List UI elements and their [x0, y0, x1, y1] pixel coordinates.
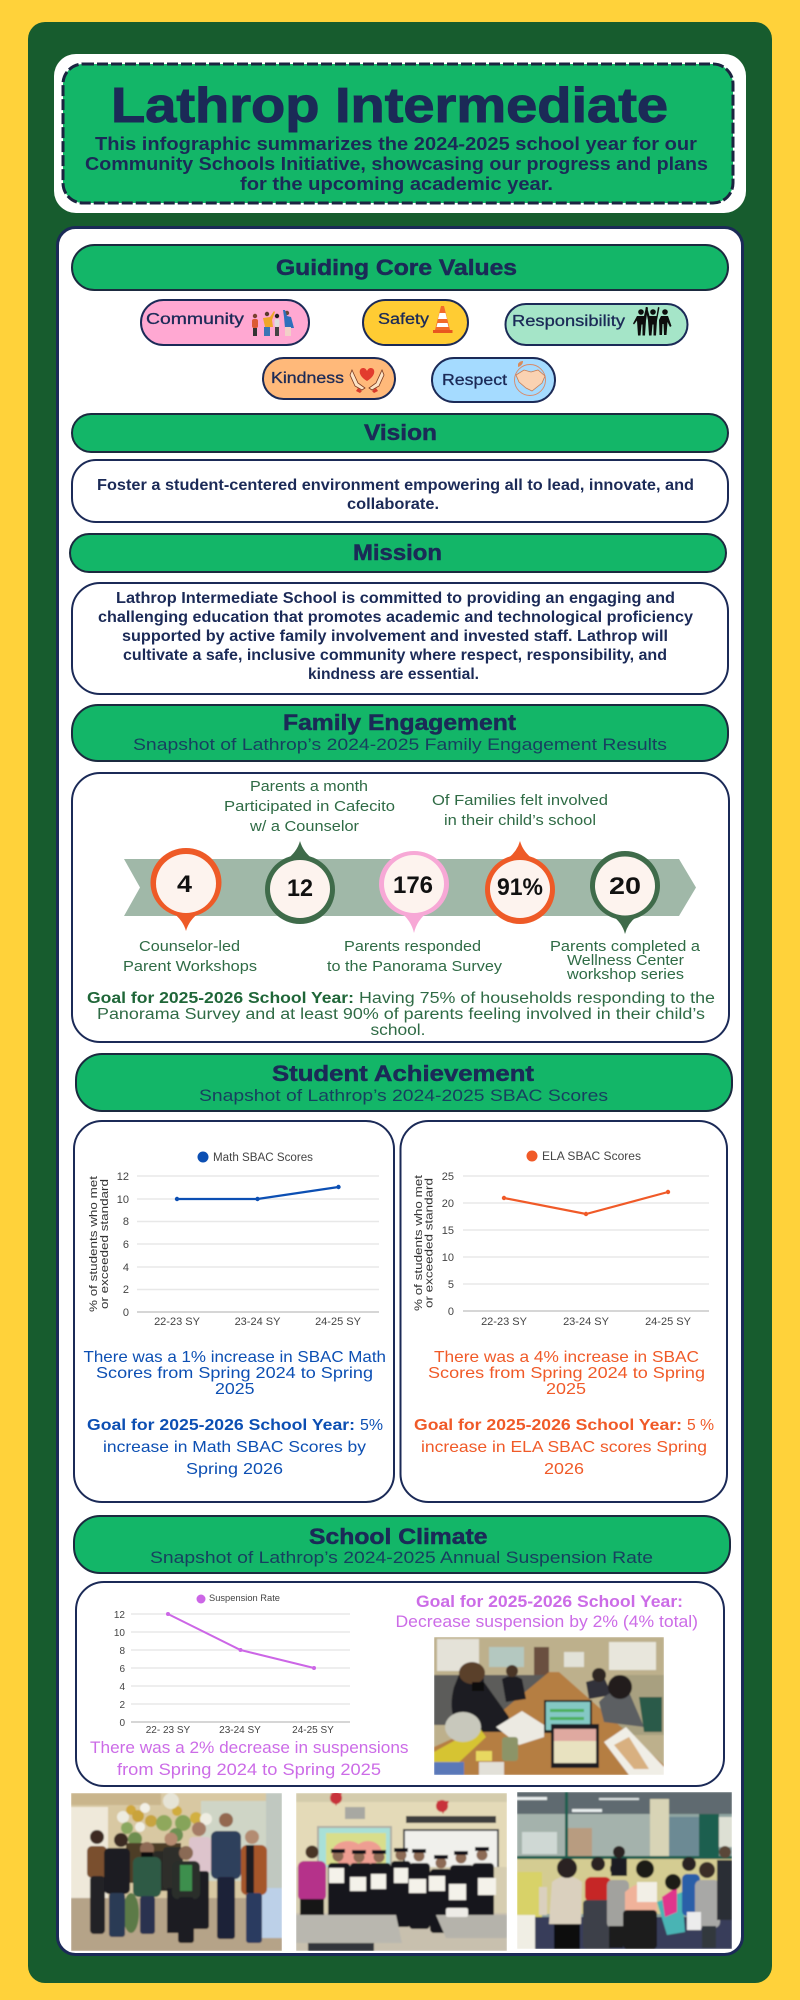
label: families involved: [432, 793, 608, 829]
line chart: math scores: 0: [123, 1307, 129, 1319]
heading: mission: Mission: [353, 540, 442, 565]
line chart: suspension rate: 22- 23 SY: [146, 1725, 191, 1736]
text: ela goal: [414, 1417, 714, 1478]
line chart: suspension rate: 8: [119, 1646, 125, 1657]
line chart: math scores: 12: [117, 1171, 129, 1183]
marker: 176 parents: [379, 851, 449, 933]
line chart: math scores: 24-25 SY: [315, 1316, 362, 1328]
header banner: [54, 54, 746, 213]
chip: kindness: [263, 358, 395, 399]
text block: family goal: Goal for 2025-2026 School Year:: [87, 990, 354, 1007]
heading: school climate: School Climate: [309, 1524, 488, 1549]
photo: parent graduates in caps and gowns: [296, 1792, 507, 1951]
chip: kindness: Kindness: [271, 370, 344, 387]
label: cafecito: w/ a Counselor: [249, 819, 359, 835]
label: panorama survey: Parents responded: [344, 939, 481, 955]
line chart: math scores: 4: [123, 1262, 129, 1274]
chip: safety: Safety: [378, 311, 429, 328]
heading: vision: [72, 414, 728, 452]
line chart: suspension rate: 23-24 SY: [219, 1725, 261, 1736]
line chart: math scores: 10: [117, 1194, 129, 1206]
label: families involved: Of Families felt involved: [432, 793, 608, 809]
line chart: ela scores: 0: [448, 1306, 454, 1318]
label: workshops: [123, 939, 257, 975]
line chart: ela scores: or exceeded standard: [424, 1178, 436, 1308]
chip: responsibility: [506, 304, 688, 345]
heading: guiding core values: Guiding Core Values: [276, 255, 517, 280]
marker: 91 percent: 91%: [497, 874, 543, 901]
line chart: ela scores: 10: [442, 1252, 454, 1264]
line chart: ela scores: % of students who met: [413, 1175, 425, 1311]
text: math goal: increase in Math SBAC Scores by: [103, 1439, 366, 1456]
panel: main white content area: [58, 228, 742, 1954]
intro text: Community Schools Initiative, showcasing our progress and plans: [85, 154, 708, 174]
line chart: suspension rate: 12: [114, 1610, 125, 1621]
line chart: math scores: 8: [123, 1216, 129, 1228]
text: suspension result: from Spring 2024 to Spring 2025: [117, 1761, 381, 1779]
marker: 12 parents: 12: [287, 875, 313, 902]
line chart: ela scores: 23-24 SY: [563, 1316, 610, 1328]
chip: responsibility: Responsibility: [512, 313, 625, 330]
text block: mission statement: challenging education that promotes academic and technological proficiency: [98, 609, 693, 626]
text: suspension goal: Decrease suspension by 2% (4% total): [396, 1613, 698, 1631]
icon: people: [252, 310, 294, 336]
line chart: suspension rate: 10: [114, 1628, 125, 1639]
marker: 176 parents: 176: [393, 872, 433, 899]
text block: vision statement: Foster a student-centered environment empowering all to lead, innovate, and: [97, 477, 694, 494]
text block: mission statement: kindness are essential.: [308, 666, 479, 683]
text: ela result: [428, 1349, 705, 1398]
heading: school climate: Snapshot of Lathrop’s 2024-2025 Annual Suspension Rate: [150, 1549, 653, 1567]
text block: family goal: school.: [370, 1022, 426, 1039]
text: suspension result: There was a 2% decrease in suspensions: [90, 1739, 408, 1757]
line chart: ela scores: [413, 1150, 709, 1328]
icon: traffic cone: [433, 306, 452, 333]
text: math result: There was a 1% increase in SBAC Math: [84, 1349, 386, 1366]
title: Lathrop Intermediate: [111, 79, 668, 133]
text: ela goal: 5 %: [687, 1417, 714, 1434]
text block: family goal: [87, 990, 715, 1039]
text: math goal: Spring 2026: [186, 1461, 283, 1478]
heading: family engagement: [72, 705, 728, 761]
heading: student achievement: [76, 1054, 732, 1111]
label: families involved: in their child’s school: [444, 813, 596, 829]
heading: family engagement: Snapshot of Lathrop’s 2024-2025 Family Engagement Results: [133, 736, 667, 754]
text block: family goal: Panorama Survey and at least 90% of parents feeling involved in their child’s: [97, 1006, 705, 1023]
panel: school climate: [76, 1582, 724, 1786]
text: ela result: There was a 4% increase in SBAC: [434, 1349, 699, 1366]
chip: community: Community: [146, 311, 244, 328]
text: math result: Scores from Spring 2024 to Spring: [96, 1365, 373, 1382]
line chart: suspension rate: 2: [119, 1700, 125, 1711]
intro text: This infographic summarizes the 2024-2025 school year for our: [95, 134, 697, 154]
text: math result: 2025: [215, 1381, 255, 1398]
line chart: math scores: 6: [123, 1239, 129, 1251]
marker: 4 workshops: [150, 848, 222, 931]
arrow band: [124, 859, 696, 916]
text: ela goal: 2026: [544, 1461, 584, 1478]
chip: respect: [432, 358, 555, 402]
text: suspension goal: [396, 1593, 698, 1631]
photo: staff group with balloons: [71, 1793, 282, 1951]
text block: vision statement: [72, 460, 728, 522]
text: ela result: 2025: [546, 1381, 586, 1398]
line chart: suspension rate: 6: [119, 1664, 125, 1675]
label: panorama survey: [327, 939, 503, 975]
label: wellness center: Parents completed a: [550, 939, 701, 955]
line chart: suspension rate: Suspension Rate: [209, 1593, 280, 1604]
chip: safety: [363, 300, 468, 345]
line chart: math scores: or exceeded standard: [99, 1179, 111, 1309]
photo: students gathered in a library: [517, 1792, 732, 1949]
line chart: suspension rate: 24-25 SY: [292, 1725, 334, 1736]
text: math goal: Goal for 2025-2026 School Year:: [87, 1417, 355, 1434]
line chart: suspension rate: 4: [119, 1682, 125, 1693]
label: wellness center: workshop series: [566, 967, 684, 983]
intro text: for the upcoming academic year.: [240, 174, 553, 194]
line chart: ela scores: 25: [442, 1171, 454, 1183]
icon: handshake: [514, 361, 546, 396]
line chart: math scores: 2: [123, 1284, 129, 1296]
text block: family goal: Having 75% of households responding to the: [359, 990, 715, 1007]
marker: 4 workshops: 4: [177, 871, 193, 898]
line chart: ela scores: 5: [448, 1279, 454, 1291]
chip: community: [141, 300, 309, 345]
text: math goal: 5%: [360, 1417, 383, 1434]
heading: vision: Vision: [364, 420, 437, 445]
chip: respect: Respect: [442, 372, 508, 389]
text block: mission statement: [72, 583, 728, 694]
heading: mission: [70, 534, 726, 572]
panel: math sbac: [74, 1121, 394, 1502]
text: ela goal: increase in ELA SBAC scores Spring: [421, 1439, 707, 1456]
panel: ela sbac: [400, 1121, 727, 1502]
heading: school climate: [74, 1516, 730, 1573]
text: ela result: Scores from Spring 2024 to Spring: [428, 1365, 705, 1382]
text: ela goal: Goal for 2025-2026 School Year:: [414, 1417, 682, 1434]
text block: mission statement: supported by active family involvement and invested staff. Lathrop will: [122, 628, 668, 645]
line chart: math scores: 22-23 SY: [154, 1316, 201, 1328]
label: cafecito: Participated in Cafecito: [224, 799, 395, 815]
text: suspension result: [90, 1739, 408, 1779]
line chart: math scores: 23-24 SY: [235, 1316, 281, 1328]
text: suspension goal: Goal for 2025-2026 School Year:: [416, 1593, 683, 1611]
line chart: ela scores: ELA SBAC Scores: [542, 1151, 641, 1163]
marker: 20 parents: 20: [609, 873, 641, 900]
text: math goal: [87, 1417, 383, 1478]
marker: 91 percent: [485, 841, 555, 924]
heading: guiding core values: [72, 245, 728, 290]
icon: hands and heart: [350, 368, 384, 393]
label: wellness center: [550, 939, 701, 983]
line chart: ela scores: 20: [442, 1198, 454, 1210]
label: cafecito: Parents a month: [250, 779, 368, 795]
text block: mission statement: Lathrop Intermediate School is committed to providing an engaging and: [116, 590, 675, 607]
heading: student achievement: Snapshot of Lathrop’s 2024-2025 SBAC Scores: [199, 1087, 608, 1105]
label: wellness center: Wellness Center: [567, 953, 684, 969]
line chart: suspension rate: 0: [119, 1718, 125, 1729]
line chart: suspension rate: [114, 1593, 350, 1736]
heading: family engagement: Family Engagement: [283, 710, 517, 735]
text block: mission statement: cultivate a safe, inclusive community where respect, responsibility, and: [123, 647, 667, 664]
photo: students meeting around a table: [434, 1637, 664, 1775]
intro text: [85, 134, 708, 194]
line chart: math scores: Math SBAC Scores: [213, 1152, 313, 1164]
label: panorama survey: to the Panorama Survey: [327, 959, 503, 975]
marker: 20 parents: [590, 851, 660, 934]
line chart: ela scores: 22-23 SY: [481, 1316, 528, 1328]
icon: three people: [633, 307, 672, 336]
text: math result: [84, 1349, 386, 1398]
marker: 12 parents: [265, 841, 335, 924]
label: cafecito: [224, 779, 395, 835]
line chart: math scores: [88, 1152, 379, 1328]
line chart: ela scores: 24-25 SY: [645, 1316, 692, 1328]
label: workshops: Counselor-led: [139, 939, 240, 955]
panel: family engagement results: [72, 773, 729, 1042]
heading: student achievement: Student Achievement: [272, 1061, 535, 1086]
label: workshops: Parent Workshops: [123, 959, 257, 975]
text block: vision statement: collaborate.: [347, 496, 439, 513]
line chart: ela scores: 15: [442, 1225, 454, 1237]
line chart: math scores: % of students who met: [88, 1176, 100, 1312]
